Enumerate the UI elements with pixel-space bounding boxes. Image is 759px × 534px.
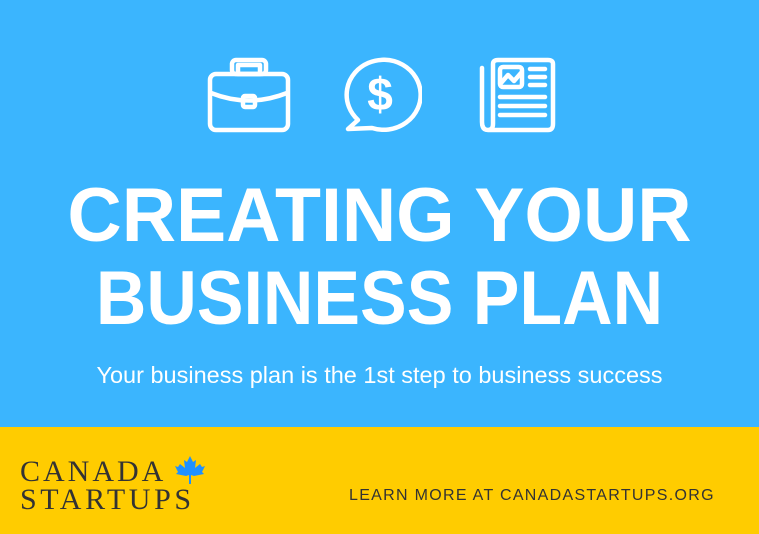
footer link text: LEARN MORE AT CANADASTARTUPS.ORG <box>349 487 715 504</box>
logo: Canada Startups: STARTUPS <box>20 483 195 516</box>
title: CREATING YOUR <box>67 173 692 258</box>
logo: Canada Startups: CANADA <box>20 455 166 488</box>
icon: dollar speech bubble <box>344 58 422 132</box>
icon: briefcase <box>208 58 290 132</box>
icon: maple leaf <box>175 456 205 484</box>
icon: dollar speech bubble: $ <box>367 68 393 120</box>
title: BUSINESS PLAN <box>96 256 663 341</box>
title <box>67 173 692 341</box>
icon: newspaper <box>480 58 556 132</box>
panel: header <box>0 0 759 427</box>
subtitle: Your business plan is the 1st step to business success <box>96 362 663 388</box>
logo: Canada Startups <box>20 455 205 516</box>
panel: footer <box>0 427 759 534</box>
